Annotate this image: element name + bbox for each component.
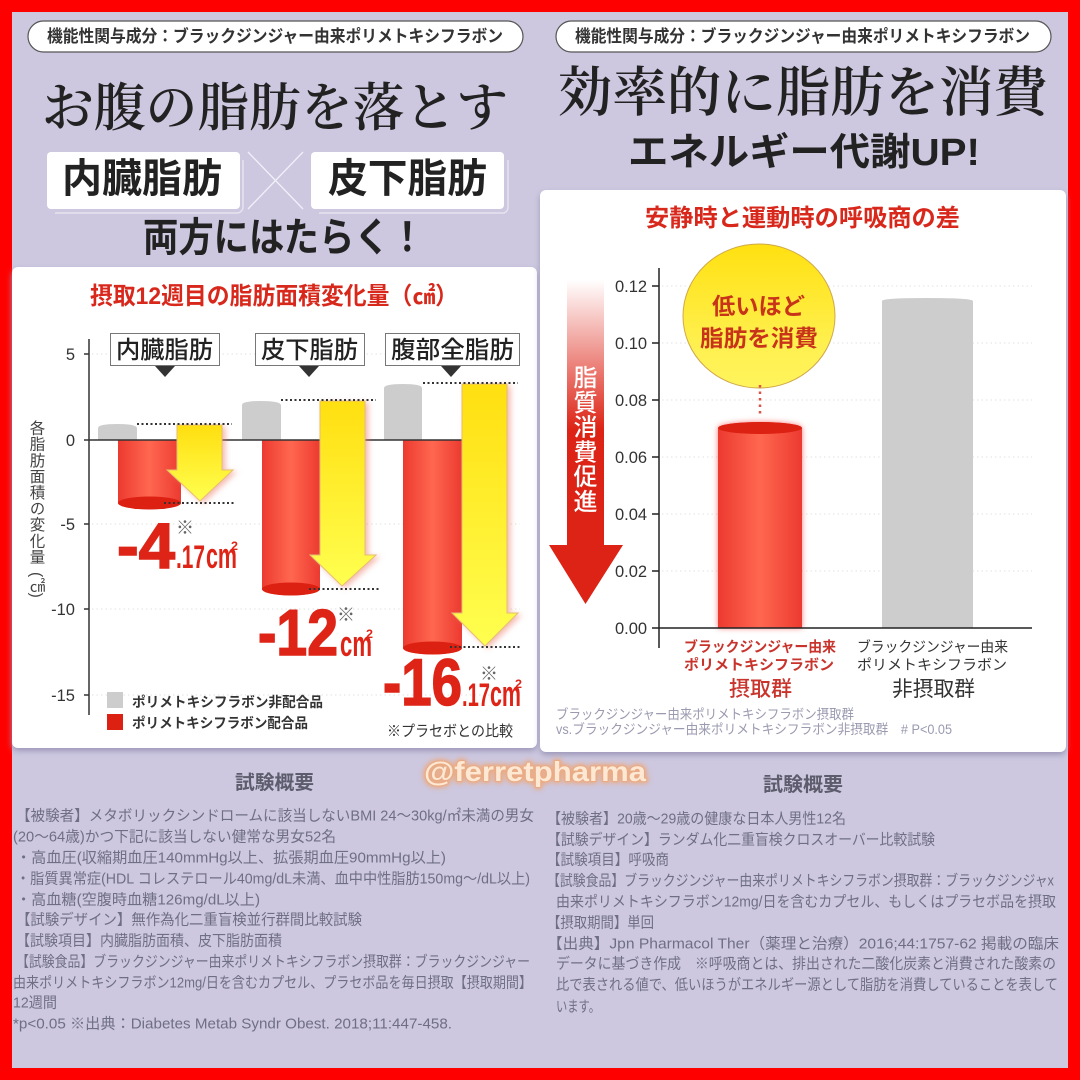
y axis labels: -10 <box>51 601 75 619</box>
y axis labels: -15 <box>51 687 75 705</box>
right study text <box>547 810 1059 1016</box>
y axis labels <box>615 278 647 638</box>
value: -16.17: 2 <box>515 677 522 691</box>
left main title: お腹の脂肪を落とす <box>42 66 508 141</box>
grid lines <box>662 286 1032 571</box>
right study text: 【試験デザイン】ランダム化二重盲検クロスオーバー比較試験 <box>547 830 935 848</box>
group label: total <box>386 334 520 377</box>
group label: subcutaneous <box>256 334 364 377</box>
value: -12: ※ <box>337 605 355 625</box>
left ingredient pill: 機能性関与成分：ブラックジンジャー由来ポリメトキシフラボン <box>47 26 503 46</box>
callout: lower burns more fat: 脂肪を消費 <box>700 325 818 351</box>
value: -16.17: ※ <box>480 664 498 684</box>
fat consumption arrow: 促 <box>574 464 598 491</box>
axes <box>652 268 1032 648</box>
footnote <box>556 706 952 737</box>
y axis labels: 5 <box>66 346 75 364</box>
y axis labels: 0.10 <box>615 335 647 353</box>
fat consumption arrow: 脂 <box>574 365 598 392</box>
callout: lower burns more fat <box>683 244 835 416</box>
value: -4.17 <box>117 510 238 582</box>
left study text: ・脂質異常症(HDL コレステロール40mg/dL未満、血中中性脂肪150mg～/dL以上) <box>16 870 530 888</box>
group label: visceral <box>110 334 220 377</box>
left study text: 【試験食品】ブラックジンジャー由来ポリメトキシフラボン摂取群：ブラックジンジャー <box>16 952 530 970</box>
right study text: 【摂取期間】単回 <box>547 914 654 932</box>
value: -16.17: -16 <box>383 645 462 719</box>
x label: intake group: ポリメトキシフラボン <box>684 657 834 674</box>
left study text: 【試験デザイン】無作為化二重盲検並行群間比較試験 <box>16 910 362 928</box>
y axis labels: -5 <box>60 516 75 534</box>
right main title: 効率的に脂肪を消費 <box>558 50 1053 127</box>
value: -4.17: cm <box>206 535 237 576</box>
x label: non-intake group <box>857 638 1008 701</box>
value: -16.17: cm <box>490 673 521 714</box>
callout: lower burns more fat: 低いほど <box>712 293 805 319</box>
value: -4.17: -4 <box>117 510 175 582</box>
chart title: 摂取12週目の脂肪面積変化量（㎠） <box>90 282 458 310</box>
fat type badges <box>47 152 508 213</box>
right study text: います。 <box>556 998 600 1016</box>
left study text: *p<0.05 ※出典：Diabetes Metab Syndr Obest. 2018;11:447-458. <box>13 1016 452 1032</box>
value: -12: -12 <box>258 596 338 669</box>
y axis labels: 0.08 <box>615 392 647 410</box>
right study text: 【被験者】20歳～29歳の健康な日本人男性12名 <box>547 810 846 828</box>
left study heading: 試験概要 <box>235 772 314 794</box>
group label: visceral: 内臓脂肪 <box>116 337 213 364</box>
right study text: データに基づき作成 ※呼吸商とは、排出された二酸化炭素と消費された酸素の <box>556 954 1056 972</box>
gray bar <box>882 298 973 628</box>
x label: non-intake group: ポリメトキシフラボン <box>857 657 1007 674</box>
footnote: ブラックジンジャー由来ポリメトキシフラボン摂取群 <box>556 706 854 722</box>
badge: visceral fat <box>47 152 243 213</box>
y axis title: 各脂肪面積の変化量 <box>28 420 45 565</box>
fat consumption arrow: 進 <box>574 489 598 516</box>
x label: intake group <box>684 638 836 701</box>
value: -16.17 <box>383 645 522 719</box>
left ingredient pill <box>28 21 523 52</box>
y axis labels: 0.00 <box>615 620 647 638</box>
x label: non-intake group: 非摂取群 <box>892 678 975 701</box>
right study text: 【出典】Jpn Pharmacol Ther（薬理と治療）2016;44:1757-62 掲載の臨床 <box>547 936 1059 952</box>
right subtitle: エネルギー代謝UP! <box>628 132 980 174</box>
value: -4.17: .17 <box>176 539 205 575</box>
right ingredient pill <box>556 21 1051 52</box>
panel: respiratory quotient chart <box>540 190 1066 752</box>
badge: subcutaneous fat <box>311 152 508 213</box>
value: -12: cm <box>340 623 372 664</box>
left study text: 由来ポリメトキシフラボン12mg/日を含むカプセル、プラセボ品を毎日摂取【摂取期間】 <box>13 974 532 992</box>
fat consumption arrow: 消 <box>574 415 598 442</box>
y axis labels: 0.12 <box>615 278 647 296</box>
fat consumption arrow: 質 <box>574 390 598 417</box>
footnote: vs.ブラックジンジャー由来ポリメトキシフラボン非摂取群 # P<0.05 <box>556 721 952 737</box>
right study heading: 試験概要 <box>763 774 843 796</box>
red bars <box>118 440 462 655</box>
y axis labels: 0 <box>66 432 75 450</box>
right study text: 【試験項目】呼吸商 <box>547 852 669 868</box>
axes <box>84 339 462 715</box>
badge: subcutaneous fat: 皮下脂肪 <box>328 157 487 201</box>
yellow arrows <box>167 384 518 646</box>
x label: non-intake group: ブラックジンジャー由来 <box>857 638 1008 656</box>
legend <box>107 692 323 731</box>
value: -4.17: 2 <box>231 539 238 553</box>
y axis labels: 0.04 <box>615 506 647 524</box>
left study text: 12週間 <box>13 994 57 1012</box>
dotted guides <box>137 383 520 647</box>
y axis labels <box>51 346 75 705</box>
left study text: ・高血圧(収縮期血圧140mmHg以上、拡張期血圧90mmHg以上) <box>16 850 446 866</box>
watermark: @ferretpharma <box>424 756 646 787</box>
y axis labels: 0.02 <box>615 563 647 581</box>
legend: ポリメトキシフラボン配合品 <box>132 715 308 731</box>
group label: total: 腹部全脂肪 <box>391 337 514 364</box>
left subtitle: 両方にはたらく！ <box>143 216 425 260</box>
left study text <box>13 808 534 1032</box>
left study text: (20～64歳)かつ下記に該当しない健常な男女52名 <box>13 828 336 846</box>
legend: ポリメトキシフラボン非配合品 <box>132 694 323 710</box>
panel: fat area chart <box>12 267 537 748</box>
value: -4.17: ※ <box>176 518 194 538</box>
value: -12: 2 <box>366 627 373 641</box>
chart title: 安静時と運動時の呼吸商の差 <box>645 205 960 232</box>
right ingredient pill: 機能性関与成分：ブラックジンジャー由来ポリメトキシフラボン <box>575 26 1030 46</box>
left study text: 【被験者】メタボリックシンドロームに該当しないBMI 24～30kg/㎡未満の男女 <box>16 808 534 824</box>
group label: subcutaneous: 皮下脂肪 <box>261 337 358 364</box>
grid lines <box>92 354 520 695</box>
badge: visceral fat: 内臓脂肪 <box>62 157 222 201</box>
value: -16.17: .17 <box>462 677 490 713</box>
placebo note: ※プラセボとの比較 <box>387 723 513 740</box>
left study text: 【試験項目】内臓脂肪面積、皮下脂肪面積 <box>16 932 282 950</box>
fat consumption arrow: 費 <box>574 439 598 466</box>
y axis title: (㎠) <box>28 572 45 598</box>
x label: intake group: 摂取群 <box>729 678 792 701</box>
red bar <box>718 422 802 628</box>
gray bars <box>98 384 422 440</box>
left study text: ・高血糖(空腹時血糖126mg/dL以上) <box>16 892 260 908</box>
x label: intake group: ブラックジンジャー由来 <box>684 638 836 656</box>
fat consumption arrow <box>549 280 623 604</box>
y axis labels: 0.06 <box>615 449 647 467</box>
right study text: 由来ポリメトキシフラボン12mg/日を含むカプセル、もしくはプラセボ品を摂取 <box>556 894 1056 910</box>
multiply sign <box>248 152 303 209</box>
